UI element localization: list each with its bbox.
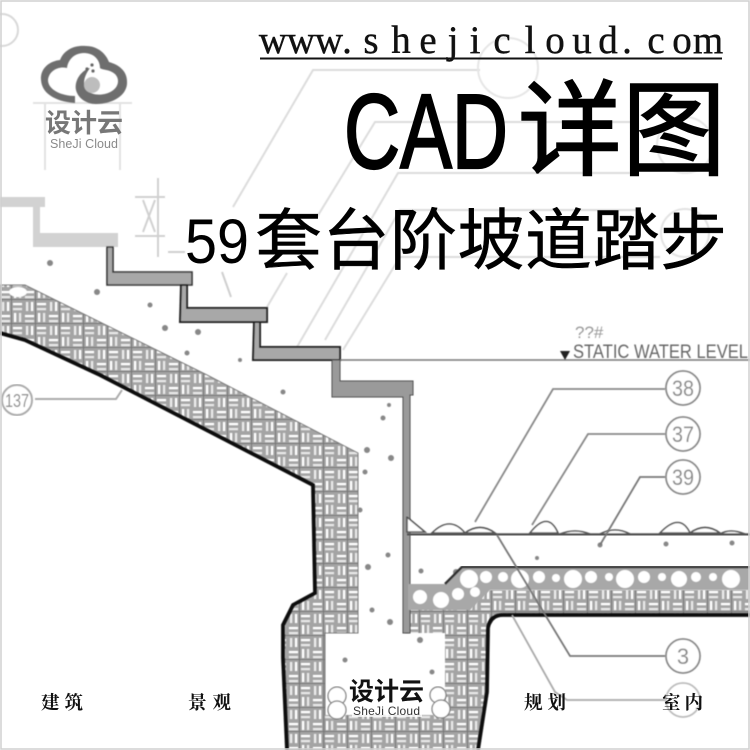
title: CAD详图: 详图 bbox=[518, 74, 726, 190]
callout 38: 38 bbox=[672, 376, 694, 401]
website url: www.shejicloud.com bbox=[259, 19, 723, 62]
title: CAD详图: CAD bbox=[344, 73, 508, 191]
stone drainage layer bbox=[408, 567, 750, 610]
callout 3: 3 bbox=[677, 644, 689, 669]
callout 137: 137 bbox=[5, 391, 29, 411]
subtitle: 59套台阶坡道踏步: 59 bbox=[185, 207, 249, 277]
gravel surface and rocks bbox=[407, 517, 750, 535]
icon: cloud bbox=[41, 46, 127, 104]
title: CAD详图 bbox=[344, 73, 726, 191]
black outer edge of the masonry bbox=[0, 333, 750, 750]
static water level line bbox=[340, 323, 750, 363]
callout 37 bbox=[532, 417, 700, 525]
callout 39 bbox=[600, 460, 700, 545]
concrete stipple bbox=[47, 260, 734, 674]
callout 39: 39 bbox=[672, 465, 694, 490]
logo wordmark: 设计云 bbox=[45, 108, 123, 138]
bottom label: 建筑: 建筑 bbox=[41, 693, 83, 714]
centre bottom logo: SheJi Cloud bbox=[353, 704, 420, 718]
callout 137 bbox=[2, 385, 122, 415]
hatched masonry wall and footing bbox=[0, 285, 750, 750]
centre bottom logo: 设计云 bbox=[349, 678, 424, 706]
bottom label: 室内: 室内 bbox=[662, 692, 703, 714]
logo subtitle: SheJi Cloud bbox=[50, 137, 118, 151]
logo: SheJi Cloud bbox=[41, 46, 127, 151]
callout behind bottom label bbox=[512, 615, 700, 717]
callout 37: 37 bbox=[672, 422, 694, 447]
subtitle: 59套台阶坡道踏步: 套台阶坡道踏步 bbox=[255, 204, 727, 279]
bottom label: 景观: 景观 bbox=[188, 693, 231, 714]
callout 38 bbox=[475, 371, 700, 522]
faded CAD background lines and annotations bbox=[0, 14, 713, 350]
static water level line: ??# bbox=[575, 323, 604, 342]
centre bottom logo bbox=[349, 678, 424, 718]
stair treads and risers bbox=[0, 197, 413, 633]
callout 3 bbox=[497, 535, 700, 673]
pit stones behind the centre logo bbox=[328, 687, 450, 719]
bottom label: 规划: 规划 bbox=[524, 693, 566, 714]
